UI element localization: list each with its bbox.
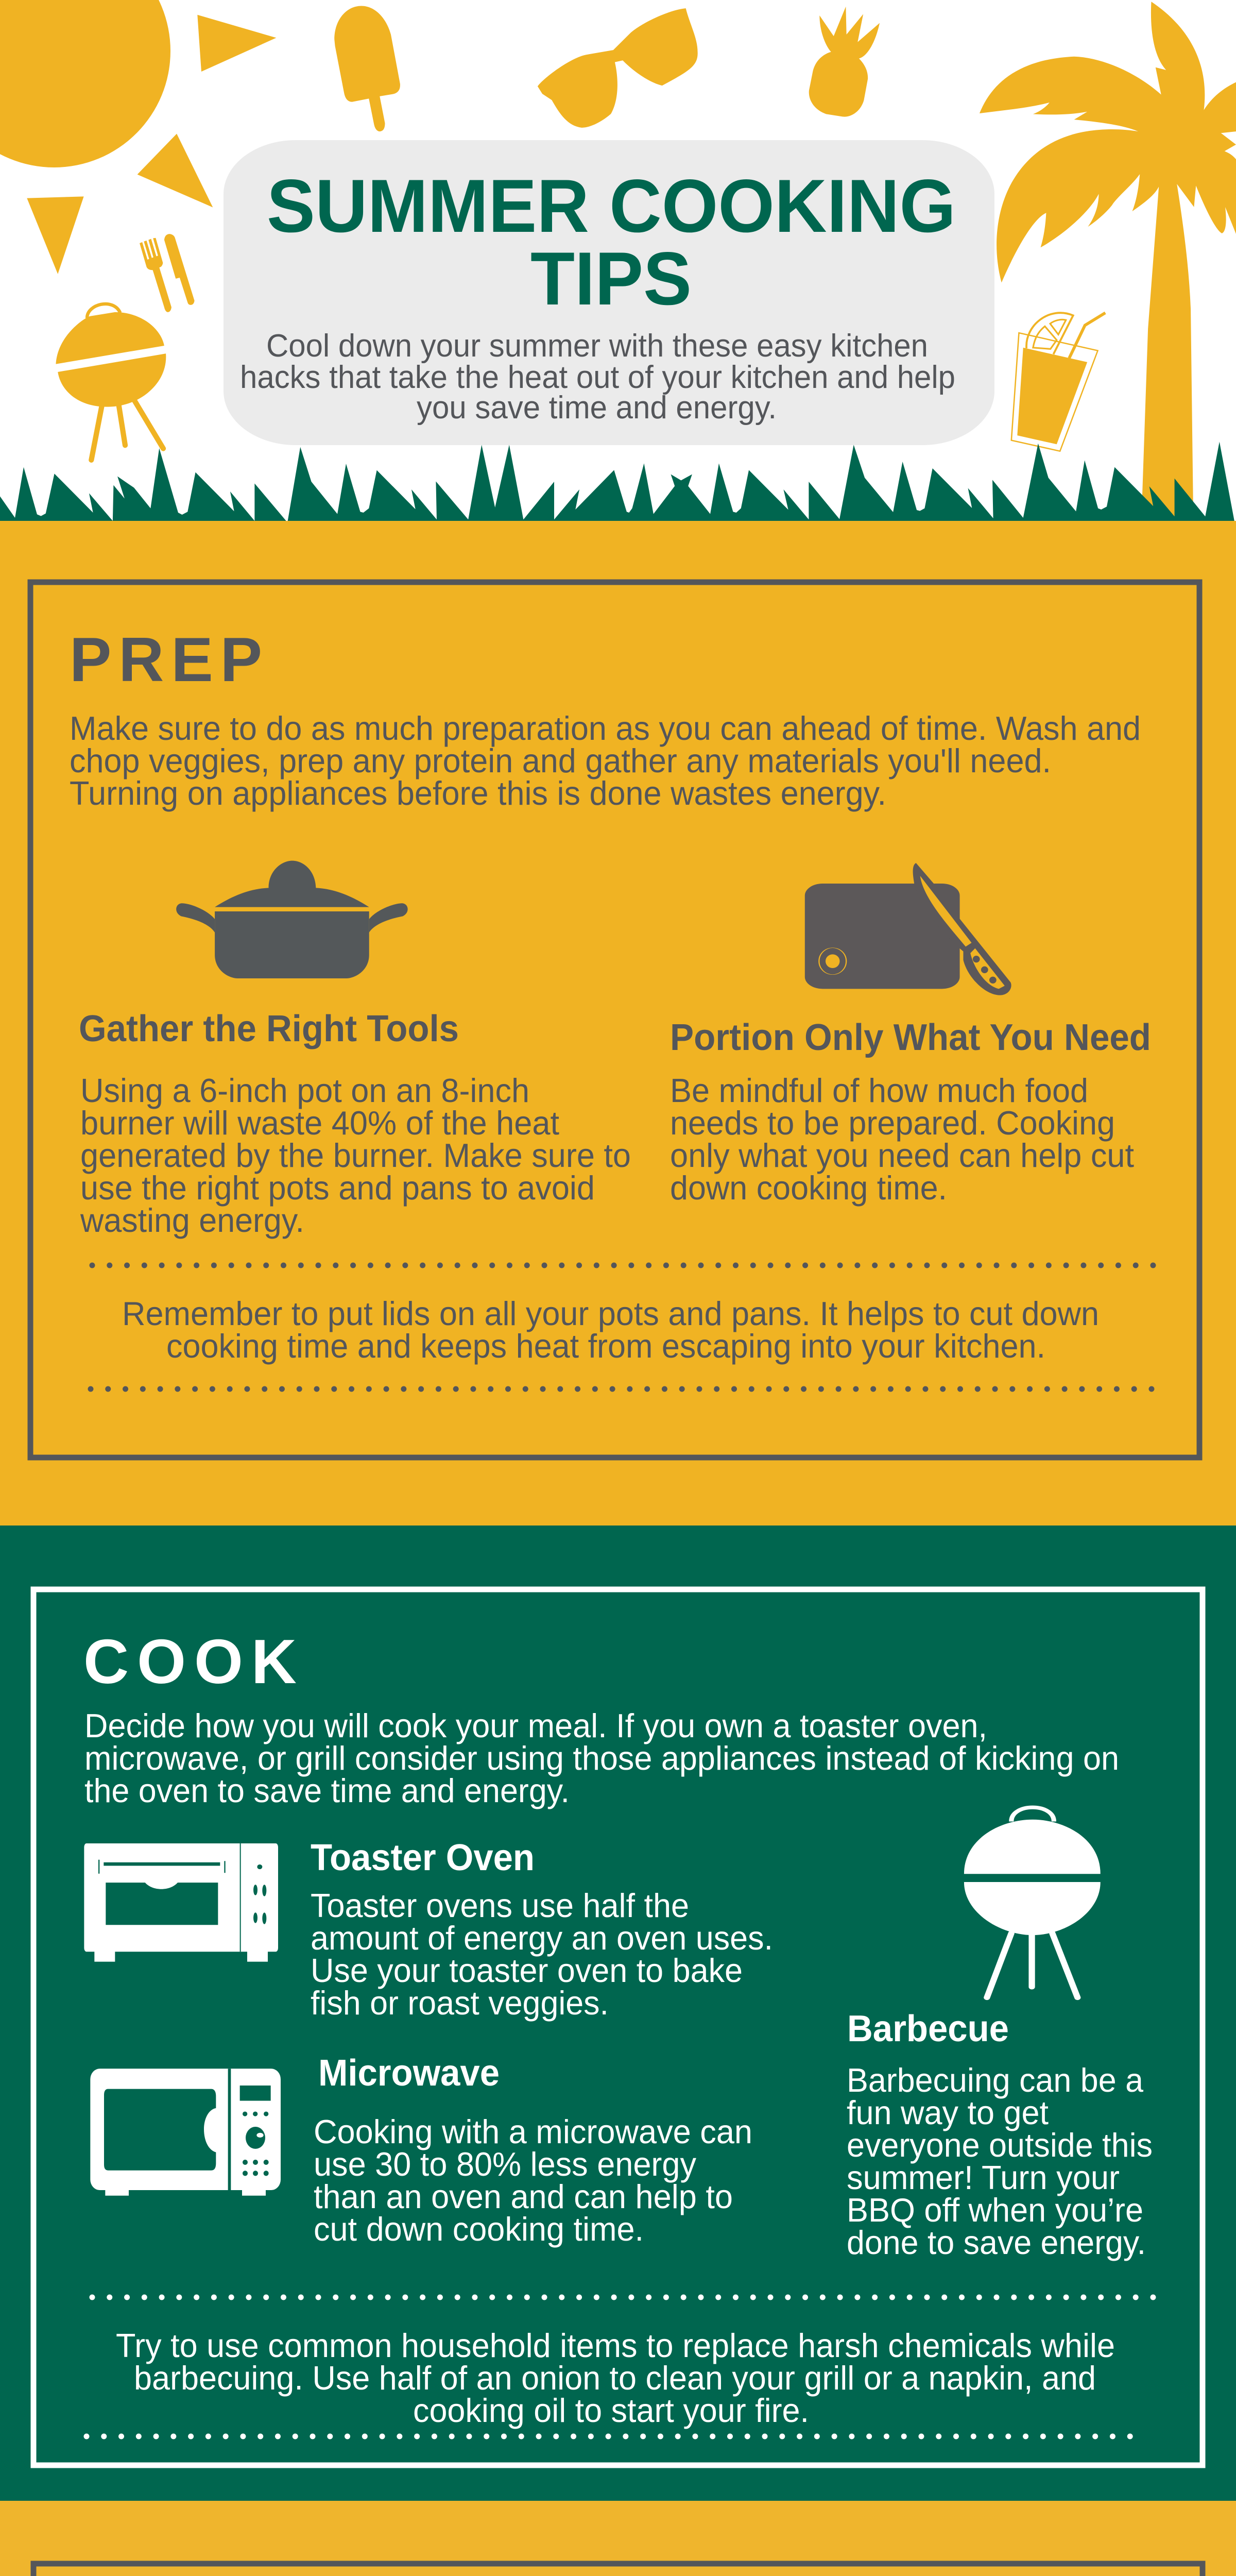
text: barbecue	[847, 2061, 1153, 2261]
heading: prep: PREP	[70, 624, 262, 694]
prep intro text: Make sure to do as much preparation as you can ahead of time. Wash and	[70, 709, 1141, 747]
callout: lids: cooking time and keeps heat from escaping into your kitchen.	[166, 1327, 1045, 1365]
text: barbecue: summer! Turn your	[847, 2159, 1120, 2196]
text: microwave	[314, 2113, 752, 2248]
icon: cold drink	[1011, 313, 1105, 451]
icon: pineapple	[809, 7, 880, 117]
cook intro text	[84, 1707, 1119, 1809]
title: SUMMER COOKING	[267, 164, 956, 248]
text: toaster oven: amount of energy an oven uses.	[311, 1919, 773, 1957]
text: toaster oven	[311, 1887, 773, 2022]
text: gather the right tools: Using a 6-inch pot on an 8-inch	[80, 1072, 529, 1109]
panel: header	[0, 0, 1236, 521]
icon: grass	[0, 442, 1234, 521]
text: portion only what you need: Be mindful of how much food	[670, 1072, 1088, 1109]
text: microwave: Cooking with a microwave can	[314, 2113, 752, 2150]
callout: lids	[122, 1295, 1099, 1365]
heading: barbecue: Barbecue	[847, 2008, 1009, 2049]
prep intro text	[70, 709, 1141, 812]
heading: cook: COOK	[83, 1626, 297, 1697]
heading: gather the right tools: Gather the Right Tools	[79, 1008, 459, 1049]
text: toaster oven: fish or roast veggies.	[311, 1984, 609, 2022]
heading: portion only what you need: Portion Only What You Need	[670, 1017, 1151, 1058]
subtitle	[240, 328, 955, 426]
icon: pot	[176, 861, 408, 978]
text: barbecue: everyone outside this	[847, 2126, 1153, 2164]
title: TIPS	[530, 236, 692, 320]
icon: barbecue grill (yellow)	[56, 304, 166, 460]
icon: cutting board and knife	[805, 863, 1011, 995]
text: toaster oven: Toaster ovens use half the	[311, 1887, 689, 1924]
panel: prep	[0, 521, 1236, 1526]
text: microwave: use 30 to 80% less energy	[314, 2145, 696, 2183]
text: gather the right tools: burner will waste 40% of the heat	[80, 1104, 559, 1142]
icon: fork and knife	[140, 234, 195, 312]
text: microwave: than an oven and can help to	[314, 2178, 733, 2215]
text: toaster oven: Use your toaster oven to bake	[311, 1952, 743, 1989]
title card	[224, 140, 994, 445]
text: portion only what you need: needs to be prepared. Cooking	[670, 1104, 1115, 1142]
heading: toaster oven: Toaster Oven	[311, 1837, 535, 1878]
text: gather the right tools: generated by the burner. Make sure to	[80, 1137, 631, 1174]
text: gather the right tools: use the right pots and pans to avoid	[80, 1169, 595, 1207]
icon: sunglasses	[538, 8, 698, 128]
text: portion only what you need: only what you need can help cut	[670, 1137, 1134, 1174]
cook intro text: microwave, or grill consider using those appliances instead of kicking on	[84, 1739, 1119, 1777]
prep intro text: chop veggies, prep any protein and gather any materials you'll need.	[70, 742, 1051, 779]
text: barbecue: Barbecuing can be a	[847, 2061, 1144, 2099]
cook intro text: the oven to save time and energy.	[84, 1772, 570, 1809]
heading: microwave: Microwave	[318, 2053, 500, 2094]
callout: household items	[116, 2327, 1115, 2429]
prep intro text: Turning on appliances before this is done wastes energy.	[70, 774, 886, 812]
icon: palm tree	[980, 2, 1236, 519]
text: portion only what you need	[670, 1072, 1134, 1207]
text: barbecue: BBQ off when you’re	[847, 2191, 1143, 2229]
callout: household items: cooking oil to start your fire.	[413, 2392, 809, 2429]
subtitle: you save time and energy.	[417, 390, 777, 426]
subtitle: hacks that take the heat out of your kitchen and help	[240, 360, 955, 395]
text: gather the right tools: wasting energy.	[80, 1201, 304, 1239]
panel: clean up	[0, 2501, 1236, 2576]
icon: microwave	[90, 2069, 281, 2196]
text: barbecue: done to save energy.	[847, 2224, 1146, 2261]
text: gather the right tools	[80, 1072, 631, 1239]
cook intro text: Decide how you will cook your meal. If you own a toaster oven,	[84, 1707, 987, 1744]
icon: barbecue grill (white)	[964, 1807, 1101, 1997]
icon: popsicle	[334, 6, 400, 131]
panel: cook	[0, 1526, 1236, 2501]
text: barbecue: fun way to get	[847, 2094, 1049, 2131]
text: portion only what you need: down cooking time.	[670, 1169, 947, 1207]
subtitle: Cool down your summer with these easy kitchen	[266, 328, 928, 364]
text: microwave: cut down cooking time.	[314, 2210, 644, 2248]
icon: sun	[0, 0, 170, 167]
callout: lids: Remember to put lids on all your pots and pans. It helps to cut down	[122, 1295, 1099, 1332]
icon: toaster oven	[84, 1843, 278, 1962]
title	[267, 164, 956, 320]
icon: sun rays	[27, 15, 276, 274]
callout: household items: Try to use common household items to replace harsh chemicals while	[116, 2327, 1115, 2364]
callout: household items: barbecuing. Use half of an onion to clean your grill or a napkin, and	[134, 2359, 1096, 2397]
